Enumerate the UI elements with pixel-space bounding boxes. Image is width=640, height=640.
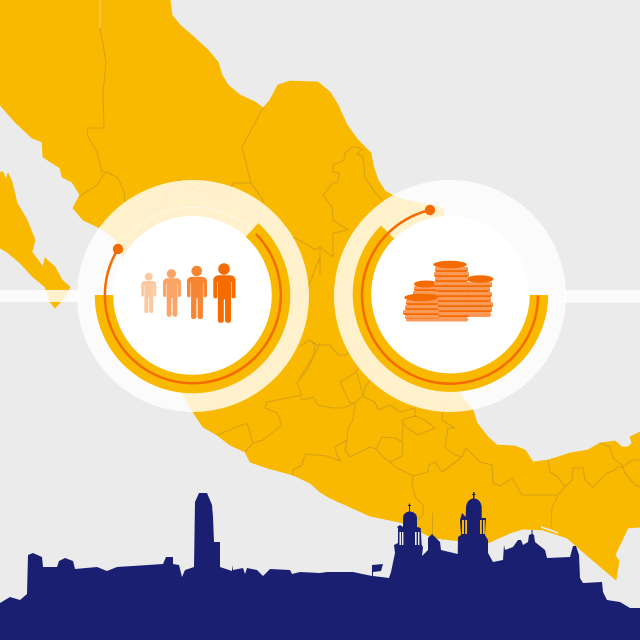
pale northern border line	[99, 0, 101, 28]
gauge: population	[77, 180, 309, 412]
arc end dot	[113, 244, 123, 254]
icon: coin stacks	[403, 261, 494, 322]
arc end dot	[425, 205, 435, 215]
city skyline silhouette	[0, 492, 640, 640]
thick progress arc	[104, 230, 281, 384]
person 3	[187, 266, 207, 319]
Baja California peninsula	[0, 172, 70, 308]
back left stack	[413, 280, 438, 296]
person 2	[163, 269, 181, 317]
thin orange arc	[362, 210, 538, 384]
skyline body	[0, 492, 640, 640]
centre stack	[433, 261, 469, 322]
left tower openings	[400, 532, 419, 545]
inner white disc	[370, 216, 530, 375]
remaining track line	[430, 208, 538, 295]
right stack	[466, 275, 494, 317]
person 1	[141, 273, 156, 313]
state borders	[79, 28, 640, 528]
left connector bar	[0, 290, 80, 302]
remaining track line	[118, 207, 256, 249]
thick progress arc	[362, 232, 539, 383]
thin orange arc	[105, 234, 281, 383]
icon: four growing people	[141, 263, 236, 323]
front left stack	[403, 294, 439, 322]
spire	[432, 513, 434, 535]
right connector bar	[564, 290, 640, 302]
gauge: money	[334, 180, 566, 412]
halo ring	[77, 180, 309, 412]
right tower openings	[462, 520, 485, 534]
inner white disc	[113, 216, 272, 375]
person 4	[213, 263, 236, 323]
coastal lagoon sliver	[541, 527, 558, 533]
halo ring	[334, 180, 566, 412]
